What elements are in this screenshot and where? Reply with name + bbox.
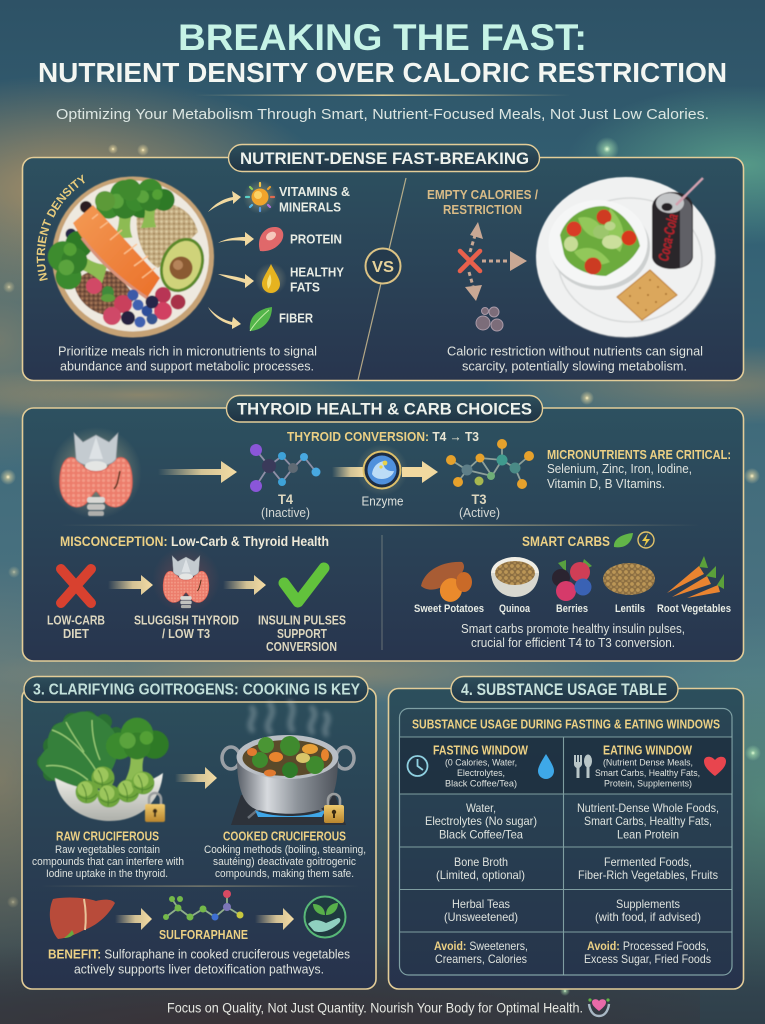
- arrow: enzyme to T3: [402, 461, 438, 483]
- panel: thyroid health and carb choices: [22, 396, 744, 661]
- icon: red cross: [61, 569, 91, 603]
- labels: smart carb foods: Lentils: [615, 603, 645, 615]
- label: insulin pulses: SUPPORT: [277, 627, 327, 641]
- heading pill: THYROID HEALTH & CARB CHOICES: [237, 400, 532, 418]
- heading pill: [228, 144, 540, 172]
- text: raw cruciferous: RAW CRUCIFEROUS: [56, 830, 159, 844]
- text: prioritize meals: abundance and support metabolic processes.: [60, 360, 314, 374]
- header: eating window: [595, 744, 700, 790]
- title: [38, 17, 727, 88]
- label: vitamins and minerals: MINERALS: [279, 200, 341, 214]
- restriction plate: [536, 177, 716, 338]
- row 2 right: Fiber-Rich Vegetables, Fruits: [578, 868, 718, 882]
- labels: smart carb foods: [414, 603, 731, 615]
- icon: sluggish thyroid: [152, 546, 220, 614]
- row 1 right: Lean Protein: [617, 828, 679, 842]
- label: healthy fats: HEALTHY: [290, 266, 345, 280]
- label: vitamins and minerals: VITAMINS &: [279, 185, 350, 199]
- icon: oil drop: [255, 263, 287, 295]
- labels: smart carb foods: Root Vegetables: [657, 603, 731, 615]
- arrow: raw to cooked: [175, 767, 217, 789]
- icon: liver: [50, 898, 115, 939]
- subtitle: Optimizing Your Metabolism Through Smart, Nutrient-Focused Meals, Not Just Low Calories.: [56, 106, 709, 123]
- row 3 left: Herbal Teas: [452, 897, 510, 911]
- arrow: to protein: [218, 232, 254, 246]
- row 1 left: Electrolytes (No sugar): [425, 814, 537, 828]
- label: sluggish thyroid: / LOW T3: [162, 627, 210, 641]
- icon: water drop: [538, 754, 554, 779]
- cracker: [617, 270, 677, 320]
- arrow: to fiber: [208, 307, 241, 329]
- text: micronutrients are critical: [547, 448, 731, 491]
- text: raw cruciferous: Raw vegetables contain: [55, 844, 160, 856]
- versus divider: [358, 178, 406, 380]
- icon: heart: [704, 757, 726, 776]
- molecule: T3: [446, 439, 534, 489]
- arrow: T4 to enzyme: [332, 467, 366, 477]
- row 3 right: (with food, if advised): [595, 910, 701, 924]
- label: T4 inactive: (Inactive): [261, 506, 310, 520]
- row 4 left: Avoid: Sweeteners,: [434, 939, 528, 953]
- icon: hand and sprout: [304, 896, 346, 938]
- text: prioritize meals: [58, 344, 317, 374]
- row 1 left: Water,: [466, 801, 496, 815]
- text: micronutrients are critical: Selenium, Zinc, Iron, Iodine,: [547, 462, 692, 476]
- label: fiber: FIBER: [279, 312, 313, 326]
- label: healthy fats: [290, 266, 345, 294]
- icon: fiber leaf: [250, 307, 272, 331]
- header: fasting window: FASTING WINDOW: [433, 744, 528, 758]
- row 4 right: Avoid: Processed Foods,: [587, 939, 709, 953]
- labels: smart carb foods: Quinoa: [499, 603, 531, 615]
- row 3 left: (Unsweetened): [444, 910, 518, 924]
- heading pill: [226, 396, 542, 422]
- label: empty calories: RESTRICTION: [443, 202, 522, 217]
- arrow: liver to sulforaphane: [115, 908, 152, 930]
- header: fasting window: [433, 744, 528, 790]
- curved label: nutrient density: NUTRIENT DENSITY: [36, 174, 85, 282]
- food: sweet potatoes: [421, 562, 472, 605]
- label: low-carb diet: DIET: [63, 627, 89, 641]
- diagram: restriction arrows: [460, 222, 527, 331]
- heading: smart carbs: SMART CARBS: [522, 534, 610, 549]
- illustration: raw cruciferous bowl: [37, 711, 169, 822]
- molecule: T4: [250, 444, 320, 492]
- label: sluggish thyroid: SLUGGISH THYROID: [134, 614, 239, 628]
- text: micronutrients are critical: Vitamin D, B VItamins.: [547, 477, 665, 491]
- row 1 right: Nutrient-Dense Whole Foods,: [577, 801, 719, 815]
- panel: substance usage table: [388, 676, 744, 989]
- label: T3 active: T3: [472, 492, 487, 507]
- label: empty calories: EMPTY CALORIES /: [427, 187, 538, 202]
- label: protein: PROTEIN: [290, 232, 342, 246]
- heading: misconception: MISCONCEPTION: Low-Carb & Thyroid Health: [60, 534, 329, 549]
- text: raw cruciferous: [32, 830, 184, 880]
- icon: thyroid gland: [50, 427, 142, 519]
- text: smart carbs promote: Smart carbs promote healthy insulin pulses,: [461, 622, 685, 636]
- row 2 left: Bone Broth: [454, 855, 508, 869]
- text: micronutrients are critical: MICRONUTRIENTS ARE CRITICAL:: [547, 448, 731, 462]
- text: caloric restriction: Caloric restriction without nutrients can signal: [447, 344, 703, 358]
- row 2 left: (Limited, optional): [436, 868, 525, 882]
- text: prioritize meals: Prioritize meals rich in micronutrients to signal: [58, 344, 317, 358]
- row 1 right: [577, 801, 719, 842]
- header: eating window: EATING WINDOW: [603, 744, 692, 758]
- panel: clarifying goitrogens: [22, 676, 376, 989]
- header: fasting window: Electrolytes,: [457, 768, 505, 779]
- header: eating window: (Nutrient Dense Meals,: [603, 758, 693, 768]
- icon: lock cooked: [324, 794, 344, 823]
- row 1 right: Smart Carbs, Healthy Fats,: [584, 814, 712, 828]
- icon: protein steak: [259, 227, 283, 251]
- icon: fork and spoon: [574, 754, 592, 778]
- title line 2: NUTRIENT DENSITY OVER CALORIC RESTRICTION: [38, 57, 727, 88]
- arrow: to healthy fats: [218, 274, 254, 288]
- illustration: cooking pot: [222, 702, 354, 825]
- panel: nutrient-dense fast-breaking: [22, 144, 744, 382]
- heading pill: 4. SUBSTANCE USAGE TABLE: [461, 681, 667, 699]
- label: sulforaphane: SULFORAPHANE: [159, 928, 248, 942]
- row 2 right: Fermented Foods,: [604, 855, 692, 869]
- row 3 left: [444, 897, 518, 924]
- label: low-carb diet: LOW-CARB: [47, 614, 105, 628]
- label: T3 active: [459, 492, 500, 520]
- row 4 left: Creamers, Calories: [435, 952, 527, 966]
- labels: smart carb foods: Berries: [556, 603, 588, 615]
- row 4 right: [584, 939, 711, 966]
- label: T3 active: (Active): [459, 506, 500, 520]
- label: enzyme: Enzyme: [362, 494, 404, 508]
- text: benefit: [48, 948, 350, 976]
- header: fasting window: Black Coffee/Tea): [445, 778, 517, 790]
- text: caloric restriction: [447, 344, 703, 374]
- icon: green check: [284, 568, 324, 602]
- arrow: thyroid to check: [223, 575, 266, 595]
- label: insulin pulses: INSULIN PULSES: [258, 614, 346, 628]
- food: quinoa: [491, 557, 539, 597]
- row 4 right: Excess Sugar, Fried Foods: [584, 952, 711, 966]
- label: low-carb diet: [47, 614, 105, 641]
- label: T4 inactive: T4: [278, 492, 293, 507]
- text: cooked cruciferous: sautéing) deactivate goitrogenic: [213, 856, 356, 868]
- arrow: to vitamins: [208, 191, 241, 212]
- label: T4 inactive: [261, 492, 310, 520]
- heading: thyroid conversion: THYROID CONVERSION: T4 → T3: [287, 429, 479, 444]
- label: empty calories: [427, 187, 538, 217]
- arrow: thyroid to T4: [158, 461, 237, 483]
- row 3 right: [595, 897, 701, 924]
- icon: sun vitamins: [243, 180, 277, 214]
- header: eating window: Smart Carbs, Healthy Fats,: [595, 768, 700, 779]
- text: benefit: actively supports liver detoxification pathways.: [74, 962, 324, 976]
- molecule: sulforaphane: [163, 890, 244, 920]
- label: sluggish thyroid: [134, 614, 239, 641]
- heading pill: [24, 676, 368, 702]
- text: raw cruciferous: Iodine uptake in the thyroid.: [46, 868, 168, 880]
- salad: [560, 206, 640, 276]
- healthy plate: [38, 176, 214, 338]
- label: insulin pulses: CONVERSION: [266, 640, 337, 654]
- row 1 left: Black Coffee/Tea: [439, 828, 523, 842]
- text: cooked cruciferous: Cooking methods (boiling, steaming,: [204, 844, 366, 856]
- text: benefit: BENEFIT: Sulforaphane in cooked cruciferous vegetables: [48, 948, 350, 962]
- text: smart carbs promote: [461, 622, 685, 650]
- text: cooked cruciferous: compounds, making them safe.: [215, 868, 354, 880]
- label: healthy fats: FATS: [290, 280, 320, 294]
- text: cooked cruciferous: [204, 830, 366, 880]
- heading: smart carbs: [522, 532, 654, 549]
- text: smart carbs promote: crucial for efficient T4 to T3 conversion.: [471, 636, 675, 650]
- text: caloric restriction: scarcity, potentially slowing metabolism.: [462, 360, 687, 374]
- usage table: [400, 708, 732, 975]
- footer note: Focus on Quality, Not Just Quantity. Nourish Your Body for Optimal Health.: [167, 1000, 583, 1016]
- title line 1: BREAKING THE FAST:: [178, 17, 587, 58]
- soda can: Coca-Cola: [655, 212, 682, 263]
- row 3 right: Supplements: [616, 897, 680, 911]
- icon: lock raw: [145, 793, 165, 822]
- row 4 left: [434, 939, 528, 966]
- icon: clock: [408, 756, 428, 776]
- label: insulin pulses: [258, 614, 346, 654]
- heading pill: NUTRIENT-DENSE FAST-BREAKING: [240, 149, 529, 168]
- row 2 right: [578, 855, 718, 882]
- row 1 left: [425, 801, 537, 842]
- versus divider: VS: [372, 259, 394, 276]
- heading pill: [451, 676, 678, 702]
- food: berries: [552, 559, 592, 601]
- row 2 left: [436, 855, 525, 882]
- text: cooked cruciferous: COOKED CRUCIFEROUS: [223, 830, 346, 844]
- header: fasting window: (0 Calories, Water,: [445, 758, 517, 768]
- heading pill: 3. CLARIFYING GOITROGENS: COOKING IS KEY: [33, 682, 361, 698]
- icon: heart in hands: [588, 998, 610, 1016]
- icon: enzyme: [356, 444, 408, 496]
- food: root vegetables: [667, 556, 724, 598]
- label: vitamins and minerals: [279, 185, 350, 214]
- labels: smart carb foods: Sweet Potatoes: [414, 603, 484, 615]
- header: eating window: Protein, Supplements): [604, 778, 692, 790]
- text: raw cruciferous: compounds that can interfere with: [32, 856, 184, 868]
- food: lentils: [603, 563, 655, 595]
- soda can: [652, 178, 703, 269]
- arrow: low-carb to thyroid: [108, 575, 153, 595]
- arrow: sulforaphane to hand: [255, 908, 294, 930]
